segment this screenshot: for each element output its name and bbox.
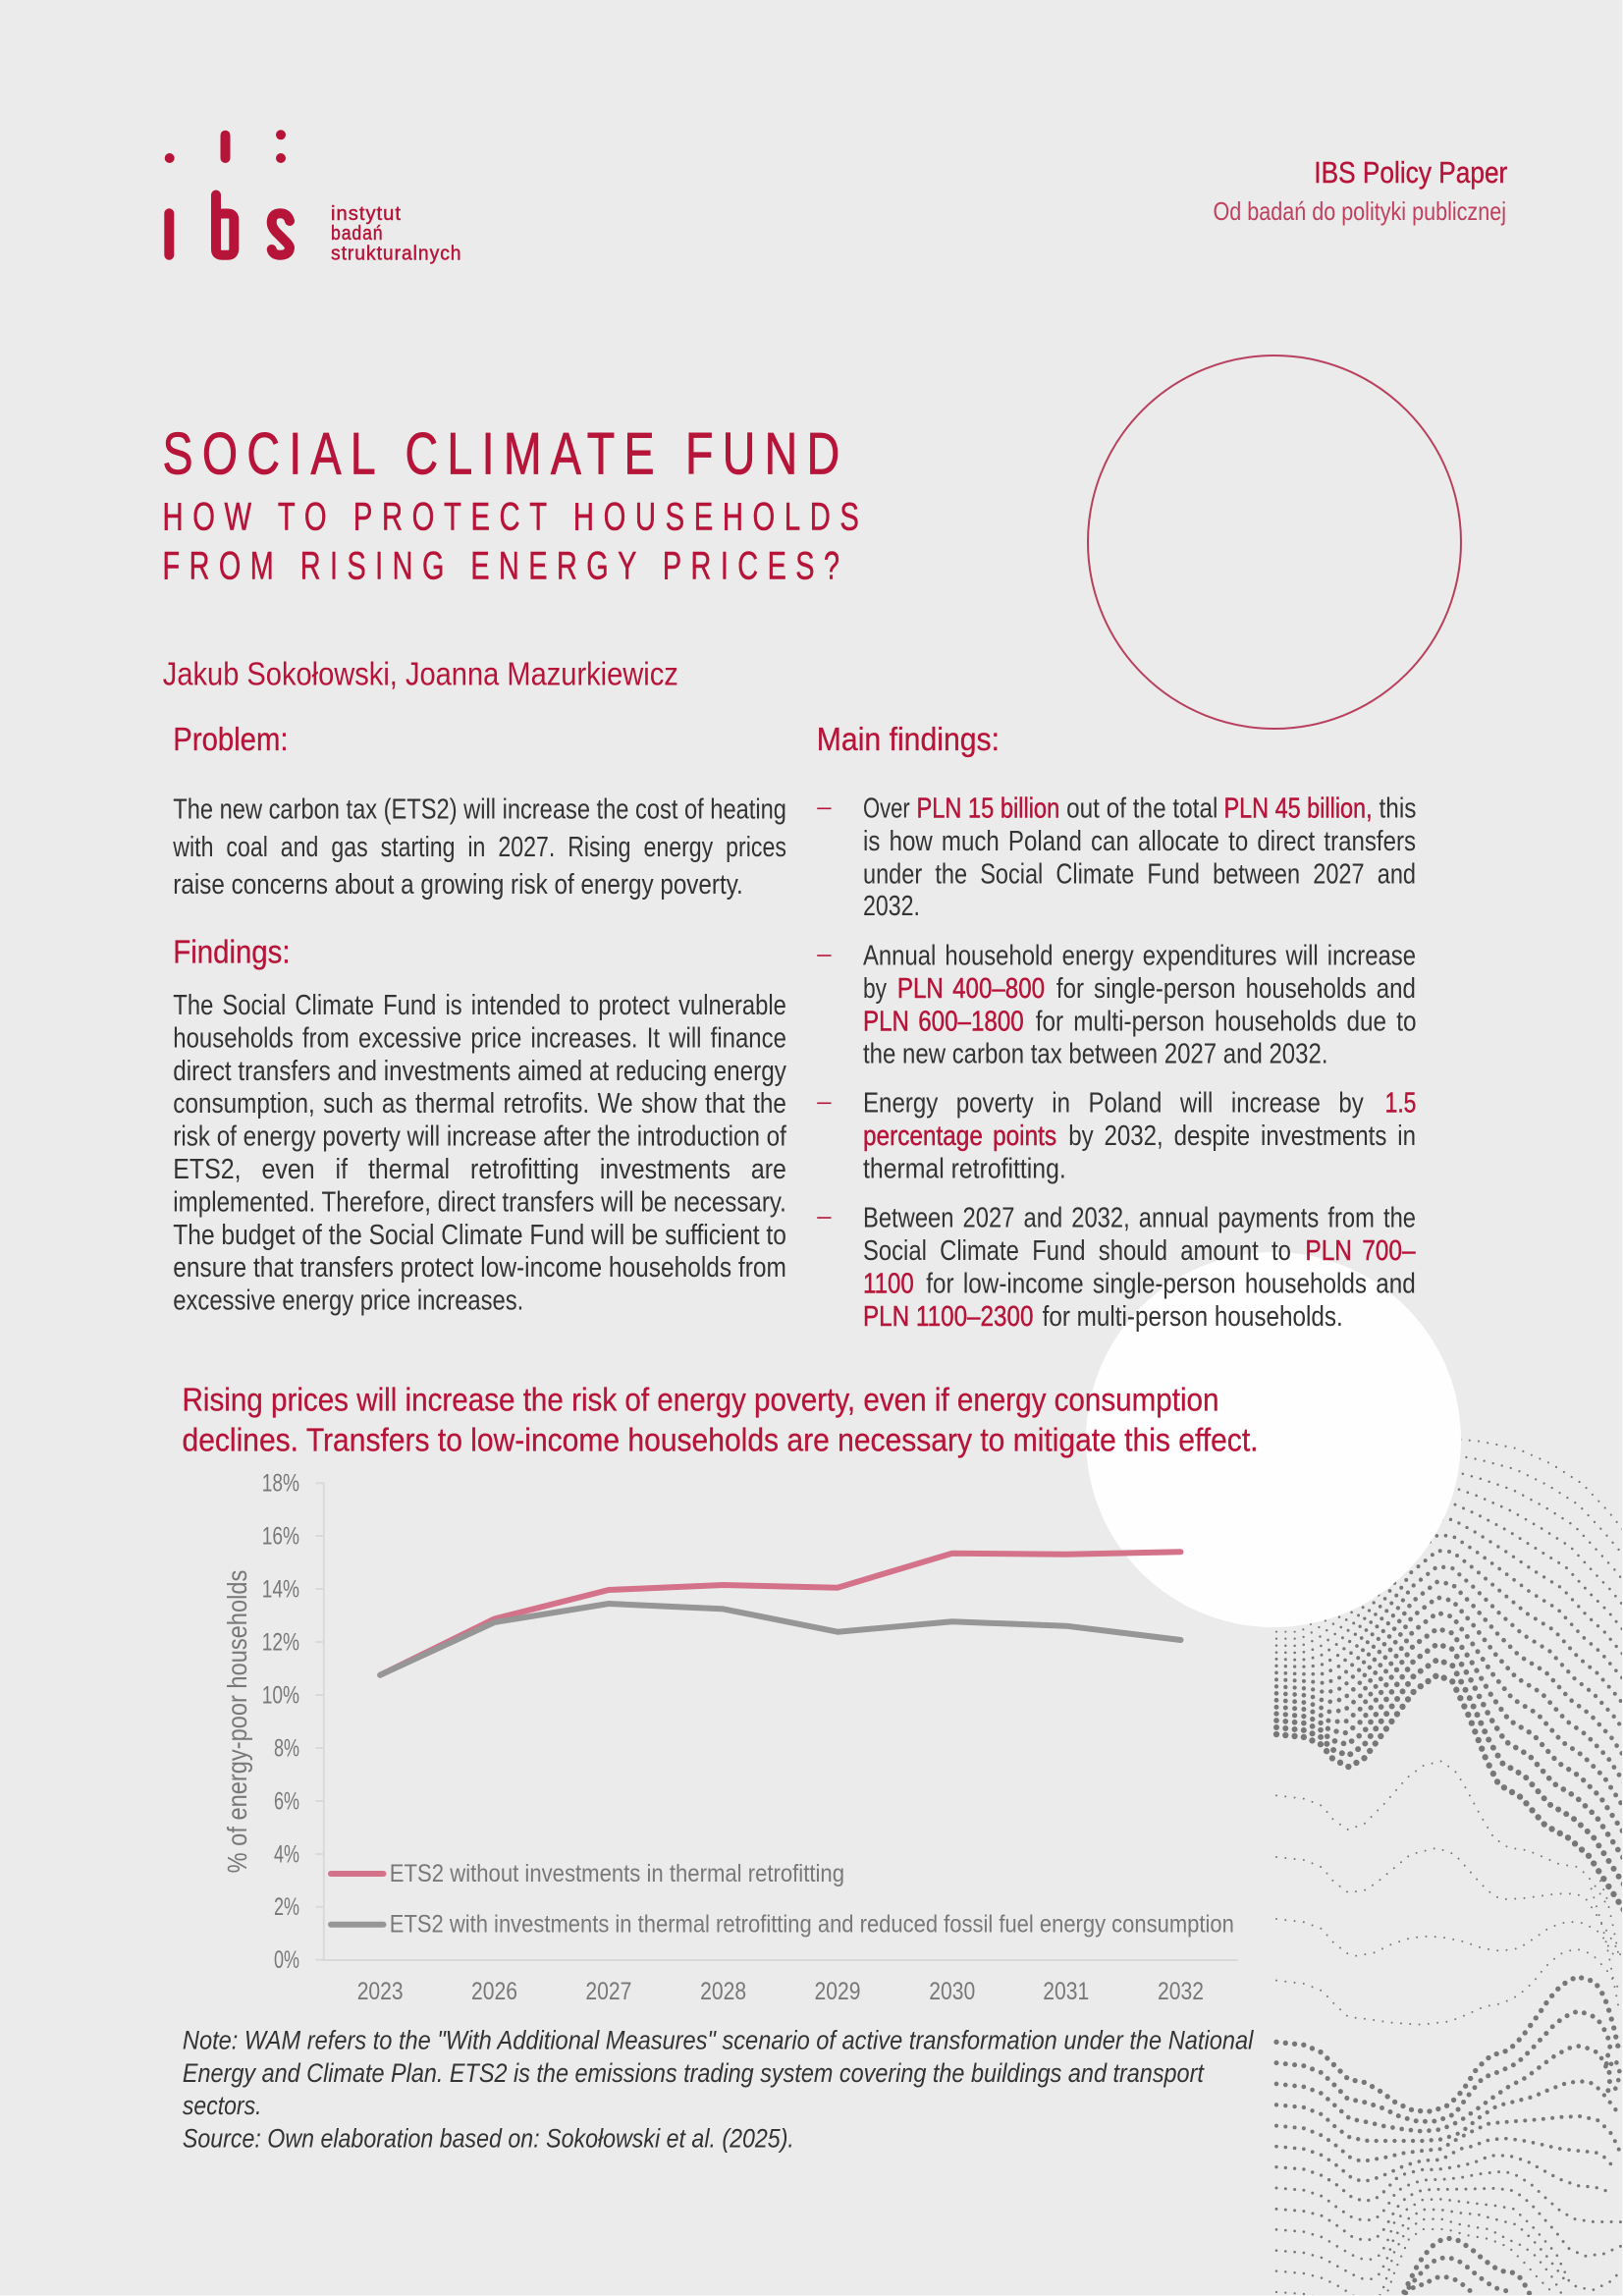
subtitle: HOW TO PROTECT HOUSEHOLDS [163, 495, 868, 538]
x-axis labels: 2028 [700, 1978, 746, 2005]
finding 4: PLN 700– [1305, 1235, 1416, 1267]
x-axis labels: 2026 [471, 1978, 517, 2005]
y-axis labels: 14% [262, 1575, 299, 1603]
findings text: direct transfers and investments aimed at reducing energy [173, 1056, 787, 1087]
legend [331, 1860, 1234, 1938]
problem text: with coal and gas starting in 2027. Rising energy prices [172, 832, 786, 863]
logo wordmark: instytut [331, 203, 402, 225]
finding 2 [817, 940, 1416, 1069]
finding 4: for multi-person households. [1043, 1301, 1343, 1333]
y-axis labels: 0% [274, 1946, 299, 1974]
chart title [183, 1382, 1259, 1457]
x-axis labels: 2030 [929, 1978, 975, 2005]
finding 1: this [1379, 793, 1416, 825]
chart title: Rising prices will increase the risk of energy poverty, even if energy consumption [183, 1382, 1219, 1418]
series: ETS2 with investments [380, 1604, 1180, 1675]
finding 2: for single-person households and [1056, 973, 1416, 1005]
logo wordmark [331, 203, 461, 264]
x-axis labels [357, 1978, 1204, 2005]
note and source: Energy and Climate Plan. ETS2 is the emissions trading system covering the buildings and transport [183, 2058, 1205, 2088]
y-axis title: % of energy-poor households [222, 1570, 252, 1873]
finding 1: Over [863, 793, 910, 825]
outline circle [1088, 355, 1461, 729]
findings text: risk of energy poverty will increase after the introduction of [173, 1121, 786, 1153]
x-axis labels: 2027 [585, 1978, 631, 2005]
heading: Main findings: Main findings: [817, 721, 1000, 757]
y-axis labels [262, 1469, 299, 1974]
finding 1 [817, 793, 1416, 922]
finding 1: PLN 15 billion [917, 793, 1059, 825]
finding 1: PLN 45 billion, [1223, 793, 1373, 825]
finding 1: 2032. [863, 891, 920, 922]
y-axis labels: 18% [262, 1469, 299, 1497]
finding 3 [817, 1088, 1416, 1185]
x-axis labels: 2031 [1043, 1978, 1089, 2005]
finding 3: by 2032, despite investments in [1068, 1121, 1416, 1152]
finding 1: out of the total [1066, 793, 1217, 825]
findings text: ensure that transfers protect low-income households from [173, 1252, 786, 1284]
line chart [222, 1469, 1238, 2005]
findings text: The budget of the Social Climate Fund will be sufficient to [173, 1220, 786, 1251]
findings text: ETS2, even if thermal retrofitting investments are [173, 1154, 786, 1185]
findings text: The Social Climate Fund is intended to protect vulnerable [173, 990, 786, 1021]
y-axis labels: 16% [262, 1522, 299, 1550]
y-axis labels: 12% [262, 1628, 299, 1656]
logo wordmark: badań [331, 223, 383, 245]
finding 3: Energy poverty in Poland will increase by [863, 1088, 1364, 1120]
problem text: raise concerns about a growing risk of energy poverty. [173, 869, 743, 901]
note and source [183, 2026, 1254, 2154]
legend item: without investments: ETS2 without investments in thermal retrofitting [390, 1860, 844, 1887]
findings text: consumption, such as thermal retrofits. We show that the [173, 1088, 786, 1120]
subtitle: FROM RISING ENERGY PRICES? [163, 544, 848, 587]
finding 3: percentage points [863, 1121, 1056, 1152]
y-axis labels: 2% [274, 1893, 299, 1921]
finding 2: by [863, 973, 888, 1005]
logo wordmark: strukturalnych [331, 243, 461, 264]
note and source: Source: Own elaboration based on: Sokołowski et al. (2025). [183, 2124, 794, 2154]
findings text [173, 990, 787, 1317]
x-axis labels: 2023 [357, 1978, 404, 2005]
heading: Findings: Findings: [173, 933, 291, 969]
decorative dotted wave pattern: upper [1276, 1439, 1623, 1912]
decorative dotted wave pattern: lower [1276, 1761, 1622, 2296]
series title: IBS Policy Paper: IBS Policy Paper [1314, 155, 1507, 190]
problem text: The new carbon tax (ETS2) will increase the cost of heating [173, 793, 786, 825]
y-axis labels: 6% [274, 1787, 299, 1815]
finding 4 [817, 1202, 1416, 1333]
finding 4: for low-income single-person households and [926, 1268, 1416, 1299]
chart title: declines. Transfers to low-income households are necessary to mitigate this effect. [183, 1421, 1259, 1457]
findings text: excessive energy price increases. [173, 1285, 523, 1317]
finding 4: Between 2027 and 2032, annual payments from the [863, 1202, 1416, 1233]
logo dots [165, 130, 286, 163]
finding 2: PLN 400–800 [897, 973, 1045, 1005]
finding 1: is how much Poland can allocate to direct transfers [863, 826, 1416, 857]
logo letters [169, 194, 290, 255]
findings text: households from excessive price increases. It will finance [173, 1022, 786, 1054]
series tagline: Od badań do polityki publicznej [1214, 196, 1506, 226]
finding 2: the new carbon tax between 2027 and 2032. [863, 1038, 1327, 1069]
y-axis labels: 10% [262, 1681, 299, 1709]
logo: ibs [165, 130, 461, 264]
finding 2: PLN 600–1800 [863, 1006, 1024, 1037]
finding 2: for multi-person households due to [1036, 1006, 1416, 1037]
main title: SOCIAL CLIMATE FUND [163, 421, 848, 487]
findings text: implemented. Therefore, direct transfers will be necessary. [173, 1186, 786, 1218]
x-axis labels: 2032 [1158, 1978, 1204, 2005]
finding 1: under the Social Climate Fund between 2027 and [863, 859, 1416, 891]
x-axis labels: 2029 [815, 1978, 860, 2005]
problem text [172, 793, 786, 901]
finding 4: PLN 1100–2300 [863, 1301, 1033, 1333]
y-axis labels: 4% [274, 1840, 299, 1868]
authors: Jakub Sokołowski, Joanna Mazurkiewicz [163, 656, 678, 692]
subtitle [163, 495, 868, 587]
white circle [1086, 1252, 1461, 1627]
note and source: Note: WAM refers to the "With Additional Measures" scenario of active transformation under the National [183, 2026, 1254, 2055]
finding 2: Annual household energy expenditures will increase [863, 940, 1416, 971]
finding 3: thermal retrofitting. [863, 1154, 1066, 1185]
finding 3: 1.5 [1385, 1088, 1416, 1120]
chart axes [315, 1483, 1238, 1960]
series: ETS2 without investments [380, 1552, 1180, 1675]
legend item: with investments: ETS2 with investments in thermal retrofitting and reduced fossil fuel energy consumption [390, 1910, 1234, 1938]
note and source: sectors. [183, 2091, 261, 2120]
heading: Problem: Problem: [173, 721, 289, 757]
y-axis labels: 8% [274, 1734, 299, 1762]
finding 4: Social Climate Fund should amount to [863, 1235, 1291, 1267]
finding 4: 1100 [863, 1268, 914, 1299]
